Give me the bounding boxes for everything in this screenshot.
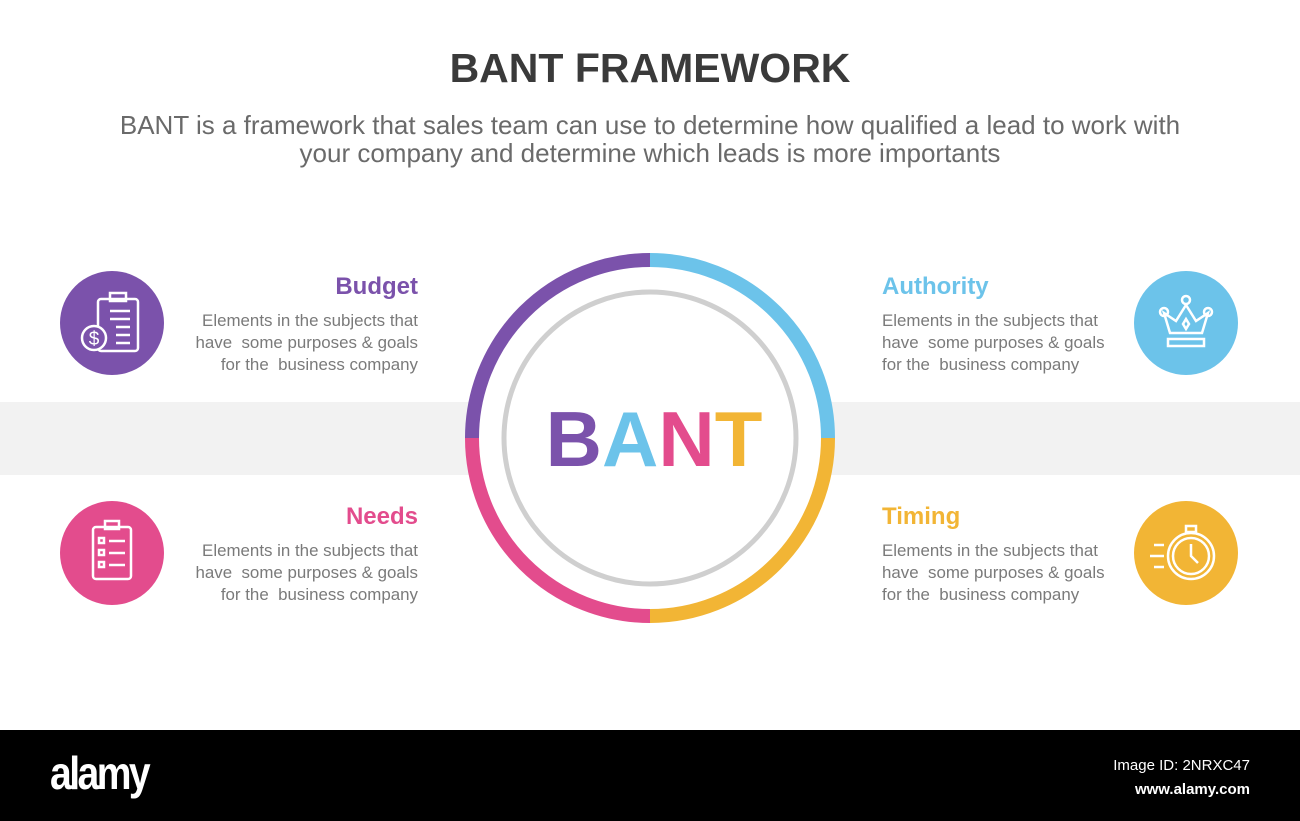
icon: timing stopwatch bbox=[1134, 501, 1238, 605]
text: authority: for the business company bbox=[882, 355, 1079, 374]
text: needs: have some purposes & goals bbox=[195, 563, 418, 582]
title: BANT FRAMEWORK bbox=[450, 45, 850, 91]
text: needs bbox=[195, 503, 418, 604]
footer bar bbox=[0, 730, 1300, 821]
text: budget bbox=[195, 273, 418, 374]
text: timing: for the business company bbox=[882, 585, 1079, 604]
text: authority: Elements in the subjects that bbox=[882, 311, 1098, 330]
icon: budget clipboard: $ bbox=[89, 329, 100, 350]
icon: needs checklist bbox=[60, 501, 164, 605]
text: budget: for the business company bbox=[221, 355, 418, 374]
text: needs: for the business company bbox=[221, 585, 418, 604]
text: timing: Timing bbox=[882, 503, 960, 530]
subtitle: BANT is a framework that sales team can use to determine how qualified a lead to work with bbox=[120, 110, 1180, 140]
subtitle: your company and determine which leads is more importants bbox=[300, 138, 1000, 168]
text: needs: Elements in the subjects that bbox=[202, 541, 418, 560]
text: authority bbox=[882, 273, 1105, 374]
text: timing: Elements in the subjects that bbox=[882, 541, 1098, 560]
text: budget: have some purposes & goals bbox=[195, 333, 418, 352]
text: needs: Needs bbox=[346, 503, 418, 530]
text: authority: have some purposes & goals bbox=[882, 333, 1105, 352]
icon: budget clipboard bbox=[60, 271, 164, 375]
footer logo: alamy bbox=[50, 747, 148, 799]
gray band bbox=[0, 402, 1300, 475]
text: budget: Budget bbox=[335, 273, 418, 300]
footer id bbox=[1113, 757, 1250, 798]
text: budget: Elements in the subjects that bbox=[202, 311, 418, 330]
text: timing bbox=[882, 503, 1105, 604]
icon: authority crown bbox=[1134, 271, 1238, 375]
text: timing: have some purposes & goals bbox=[882, 563, 1105, 582]
footer id: Image ID: 2NRXC47 bbox=[1113, 757, 1250, 774]
subtitle bbox=[120, 110, 1180, 168]
BANT letters: BANT bbox=[546, 395, 762, 483]
text: authority: Authority bbox=[882, 273, 989, 300]
footer id: www.alamy.com bbox=[1135, 781, 1250, 798]
